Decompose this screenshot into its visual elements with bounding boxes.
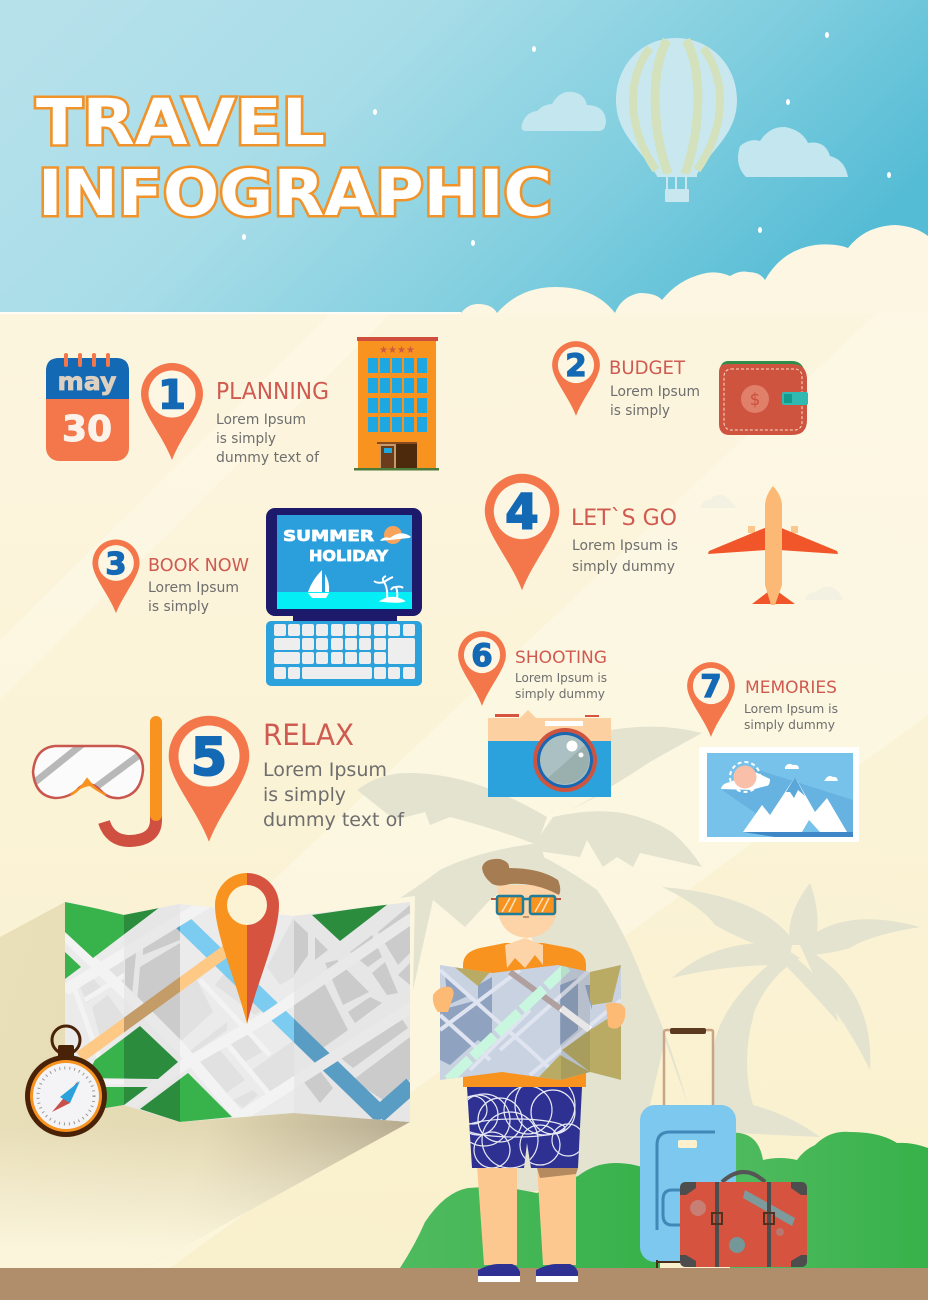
orange shirt: [463, 943, 586, 1087]
pin: step 4: 4: [505, 484, 539, 540]
text: planning: is simply: [216, 431, 276, 447]
folded map: [60, 895, 420, 1130]
held map olive areas: [452, 965, 621, 1082]
pin: step 1: [141, 363, 203, 460]
text: relax: RELAX: [263, 718, 354, 752]
map pin: [215, 873, 279, 1024]
text: let's go: simply dummy: [572, 559, 675, 575]
map blocks: light panels: [78, 917, 294, 1108]
folded panel river: [178, 918, 412, 1117]
text: book now: [148, 555, 249, 615]
icon: calendar: 30: [62, 409, 112, 450]
held map roads: [440, 970, 621, 1078]
text: budget: [609, 357, 700, 419]
icon: diving mask and snorkel: [30, 722, 156, 841]
icon: wallet: $: [750, 390, 760, 410]
text: memories: [744, 678, 838, 732]
folded panel parks: [124, 904, 388, 1122]
pin: step 4: [485, 474, 559, 590]
blue suitcase: [640, 1028, 736, 1268]
text: book now: Lorem Ipsum: [148, 580, 239, 596]
text: shooting: [515, 648, 607, 701]
icon: airplane: [708, 486, 838, 605]
map roads: [78, 906, 294, 1118]
held map route: [448, 967, 567, 1080]
text: budget: BUDGET: [609, 357, 685, 379]
text: budget: Lorem Ipsum: [610, 384, 700, 400]
text: planning: PLANNING: [216, 379, 329, 405]
laptop screen: [266, 508, 422, 622]
balloon: [616, 38, 737, 202]
laptop keyboard: [266, 621, 422, 686]
pin: step 7: [687, 662, 735, 737]
hands: [433, 987, 625, 1029]
held map river: [508, 970, 592, 1030]
text: shooting: Lorem Ipsum is: [515, 670, 607, 685]
text: budget: is simply: [610, 403, 670, 419]
text: memories: MEMORIES: [745, 678, 837, 698]
text: book now: BOOK NOW: [148, 555, 249, 576]
text: relax: is simply: [263, 784, 346, 806]
mouth: [523, 916, 529, 918]
pin: step 3: [92, 539, 140, 613]
text: memories: simply dummy: [744, 717, 836, 732]
palm tree: right: [662, 883, 920, 1137]
traveller figure: [433, 859, 625, 1282]
map route: [80, 948, 230, 1057]
laptop screen: HOLIDAY: [309, 547, 389, 565]
collar: [505, 938, 543, 968]
map river: [180, 919, 380, 1120]
title: TRAVEL: [36, 86, 325, 159]
icon: calendar: [46, 355, 129, 461]
sky panel: [0, 0, 928, 313]
icon: mountain photo: [699, 747, 859, 842]
map shadow: [0, 902, 410, 1290]
text: planning: Lorem Ipsum: [216, 412, 306, 428]
ground: [0, 1268, 928, 1300]
face: [498, 885, 557, 938]
text: relax: [263, 718, 405, 831]
text: relax: Lorem Ipsum: [263, 759, 387, 781]
palm tree: left: [357, 727, 702, 1195]
laptop screen: SUMMER: [283, 527, 374, 545]
title: [36, 86, 552, 230]
held map blocks: [440, 975, 592, 1065]
text: book now: is simply: [148, 599, 209, 615]
icon: camera: [488, 710, 611, 797]
icon: small clouds near plane: [700, 495, 843, 600]
pin: step 5: [169, 716, 249, 842]
icon: wallet: [719, 361, 808, 435]
bushes: [400, 1132, 928, 1268]
map side streets: [75, 975, 270, 1095]
sand background: [0, 300, 928, 1300]
text: let's go: LET`S GO: [571, 506, 677, 531]
stars: [242, 32, 891, 246]
shoes: [478, 1264, 578, 1282]
folded panel route: [124, 977, 180, 1032]
held map fold shading: [561, 960, 590, 1085]
pin: step 3: 3: [105, 547, 127, 582]
light beams: [0, 265, 928, 1268]
text: let's go: Lorem Ipsum is: [572, 538, 678, 554]
icon: hotel: ★★★★: [379, 345, 415, 356]
text: planning: dummy text of: [216, 450, 320, 466]
legs: [477, 1165, 578, 1265]
hair: [482, 859, 560, 895]
text: memories: Lorem Ipsum is: [744, 701, 838, 716]
pin: step 2: 2: [565, 348, 587, 384]
pin: step 6: 6: [471, 638, 493, 674]
text: let's go: [571, 506, 678, 575]
red suitcase: [680, 1172, 807, 1267]
folded panel blocks: [125, 905, 410, 1103]
text: relax: dummy text of: [263, 809, 405, 831]
icon: hotel: [354, 337, 439, 470]
clouds: [522, 92, 848, 177]
open map held: [440, 965, 621, 1080]
shorts: [467, 1087, 582, 1168]
icon: calendar: may: [58, 367, 116, 396]
pin: step 5: 5: [191, 728, 227, 788]
folded panel roads: [125, 914, 410, 1082]
pin: step 7: 7: [700, 669, 722, 705]
map parks: [65, 902, 388, 1122]
sunglasses: [491, 896, 561, 914]
palm tree silhouettes: [357, 727, 920, 1195]
cloud seam highlight: [0, 312, 461, 314]
text: shooting: SHOOTING: [515, 648, 607, 668]
cloud bank: [461, 225, 928, 313]
pin: step 2: [552, 341, 600, 416]
compass: [25, 1026, 107, 1137]
icon: laptop: [266, 508, 422, 686]
title: INFOGRAPHIC: [38, 157, 552, 230]
folded panels: [124, 904, 410, 1122]
text: planning: [216, 379, 329, 466]
pin: step 6: [458, 631, 506, 706]
text: shooting: simply dummy: [515, 686, 606, 701]
pin: step 1: 1: [158, 372, 186, 418]
